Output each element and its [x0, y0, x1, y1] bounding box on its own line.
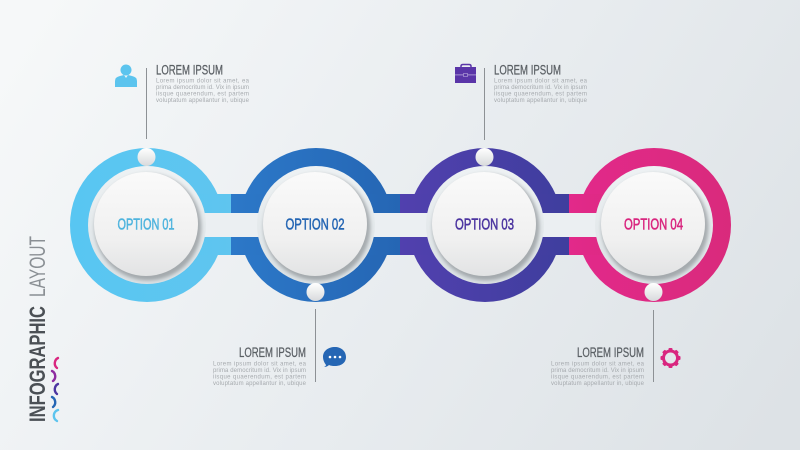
text block: option 4: iisque quaerendum, est partem: [551, 374, 644, 380]
option 4 button: [595, 166, 713, 284]
text block: option 2: prima democritum id. Vix in ipsum: [213, 368, 306, 374]
option 2 button: OPTION 02: [286, 216, 345, 234]
central gap strip: [147, 213, 654, 237]
text block: option 2: [213, 345, 307, 387]
text block: option 2: iisque quaerendum, est partem: [213, 374, 306, 380]
icon: briefcase: [455, 64, 476, 83]
ring 1: [70, 148, 231, 302]
text block: option 3: LOREM IPSUM: [494, 62, 561, 78]
text block: option 2: LOREM IPSUM: [239, 345, 306, 360]
ring 4: [569, 148, 731, 302]
text block: option 1: [156, 62, 250, 104]
text block: option 4: Lorem ipsum dolor sit amet, ea: [551, 362, 645, 368]
option 1 button: [88, 166, 206, 284]
vertical title: LAYOUT: [25, 236, 50, 297]
text block: option 4: [551, 345, 645, 387]
option 2 button: [257, 166, 375, 284]
icon: gear: [660, 348, 680, 368]
text block: option 1: Lorem ipsum dolor sit amet, ea: [156, 78, 250, 84]
text block: option 1: LOREM IPSUM: [156, 62, 223, 78]
leader line 3: [484, 68, 485, 140]
text block: option 2: Lorem ipsum dolor sit amet, ea: [213, 362, 307, 368]
option 4 button: OPTION 04: [624, 216, 683, 234]
option 3 button: [426, 166, 544, 284]
leader line 1: [146, 68, 147, 139]
text block: option 2: voluptatum appellantur in, ubique: [213, 381, 307, 387]
text block: option 3: [494, 62, 588, 104]
text block: option 4: prima democritum id. Vix in ipsum: [551, 368, 644, 374]
icon: person: [115, 64, 137, 87]
option 3 button: OPTION 03: [455, 216, 514, 234]
ring 2: [231, 148, 400, 302]
marker ball 4: [644, 283, 662, 301]
text block: option 3: iisque quaerendum, est partem: [494, 92, 587, 98]
text block: option 3: voluptatum appellantur in, ubique: [494, 98, 588, 104]
marker ball 1: [138, 148, 156, 166]
text block: option 1: iisque quaerendum, est partem: [156, 92, 249, 98]
text block: option 3: Lorem ipsum dolor sit amet, ea: [494, 78, 588, 84]
icon: chat bubble: [323, 347, 346, 367]
connector bands and coloured rings: [70, 148, 731, 302]
ring 3: [400, 148, 569, 302]
marker ball 3: [476, 148, 494, 166]
text block: option 1: prima democritum id. Vix in ipsum: [156, 85, 249, 91]
option 1 button: OPTION 01: [118, 216, 175, 234]
marker ball 2: [306, 283, 324, 301]
text block: option 4: voluptatum appellantur in, ubique: [551, 381, 645, 387]
leader line 2: [315, 309, 316, 382]
leader line 4: [653, 310, 654, 382]
vertical title: INFOGRAPHIC: [25, 306, 50, 422]
text block: option 3: prima democritum id. Vix in ipsum: [494, 85, 587, 91]
text block: option 4: LOREM IPSUM: [577, 345, 644, 360]
wave decoration: [52, 358, 58, 421]
text block: option 1: voluptatum appellantur in, ubique: [156, 98, 250, 104]
